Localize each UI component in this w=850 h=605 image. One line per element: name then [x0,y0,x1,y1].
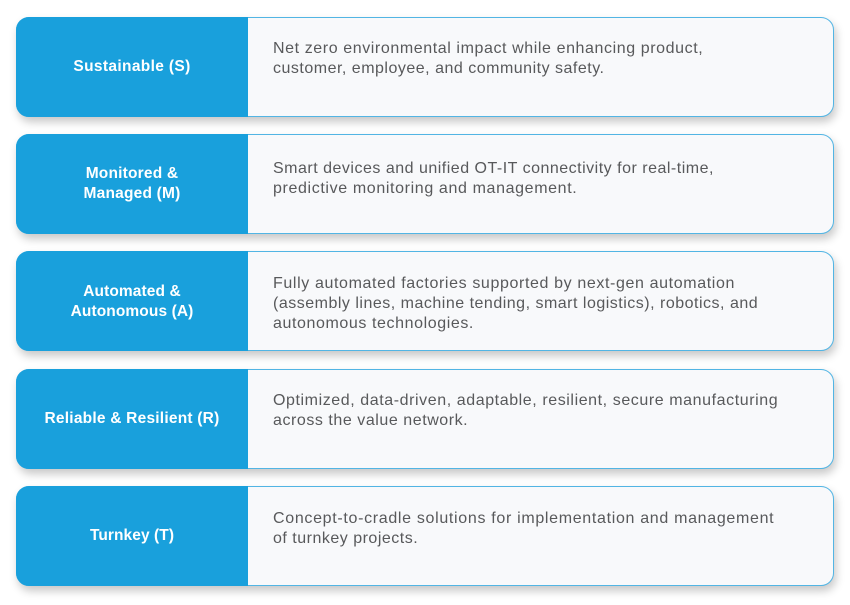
text: Automated and Autonomous description [273,275,758,332]
heading: Automated and Autonomous [16,251,248,351]
text: Turnkey description [273,510,774,547]
text: Sustainable description: customer, employee, and community safety. [273,60,604,77]
panel: Sustainable [16,17,834,117]
text: Reliable and Resilient description [273,392,778,429]
text: Turnkey description: of turnkey projects. [273,530,418,547]
heading: Reliable and Resilient [16,369,248,469]
text: Reliable and Resilient description: Optimized, data-driven, adaptable, resilient, secure manufacturing [273,392,778,409]
heading: Turnkey: Turnkey (T) [90,527,174,544]
heading: Reliable and Resilient: Reliable & Resilient (R) [45,410,219,427]
text: Turnkey description: Concept-to-cradle solutions for implementation and management [273,510,774,527]
text: Sustainable description [273,40,703,77]
panel: Automated and Autonomous [16,251,834,351]
panel: Monitored and Managed [16,134,834,234]
text: Monitored and Managed description: Smart devices and unified OT-IT connectivity for real-time, [273,160,714,177]
panel: Reliable and Resilient [16,369,834,469]
heading: Monitored and Managed: Monitored & [86,165,178,182]
text: Automated and Autonomous description: autonomous technologies. [273,315,474,332]
text: Monitored and Managed description: predictive monitoring and management. [273,180,577,197]
text: Monitored and Managed description [273,160,714,197]
heading: Turnkey [16,486,248,586]
text: Automated and Autonomous description: Fully automated factories supported by next-gen automation [273,275,735,292]
heading: Automated and Autonomous: Autonomous (A) [71,303,193,320]
text: Sustainable description: Net zero environmental impact while enhancing product, [273,40,703,57]
heading: Sustainable: Sustainable (S) [73,58,191,75]
heading: Sustainable [16,17,248,117]
panel: Turnkey [16,486,834,586]
text: Automated and Autonomous description: (assembly lines, machine tending, smart logistics), robotics, and [273,295,758,312]
heading: Monitored and Managed [16,134,248,234]
heading: Automated and Autonomous: Automated & [83,283,181,300]
heading: Monitored and Managed: Managed (M) [84,185,180,202]
text: Reliable and Resilient description: across the value network. [273,412,468,429]
